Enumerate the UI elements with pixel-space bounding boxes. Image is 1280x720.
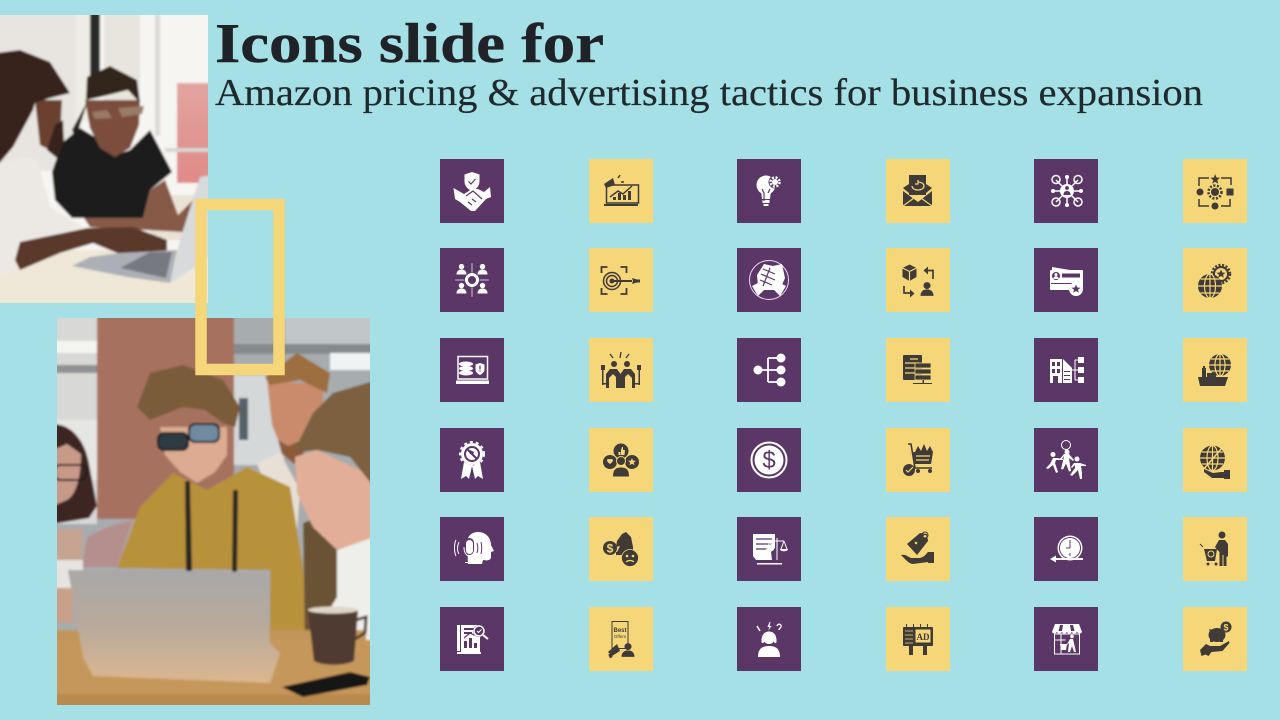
icon: storefront with shopper <box>1034 607 1098 671</box>
icon: process cycle with star <box>1183 159 1247 223</box>
icon: clasped hands in circle <box>737 248 801 312</box>
icon: credit card with star badge <box>1034 248 1098 312</box>
icon: target with dart <box>589 248 653 312</box>
icon: pricing strategy chess knight: $ <box>607 542 614 556</box>
icon: ad billboard <box>886 607 950 671</box>
icon: confused support agent <box>737 607 801 671</box>
icon: building with connected blocks <box>1034 338 1098 402</box>
icon: ad billboard: AD <box>916 632 930 642</box>
decorative yellow rectangular frame <box>201 204 279 370</box>
icon: piggy bank on hand: $ <box>1223 622 1229 632</box>
icon: branching hierarchy <box>737 338 801 402</box>
icon: head with microphone <box>440 517 504 581</box>
icon: hand with price tag <box>886 517 950 581</box>
icon: dollar coin <box>737 428 801 492</box>
icon: piggy bank on hand <box>1183 607 1247 671</box>
icon: document with server rack <box>886 338 950 402</box>
icon: legal document with scales <box>737 517 801 581</box>
icon: dollar coin: $ <box>762 447 776 474</box>
icon: best offers poster with megaphone: Best <box>613 628 627 634</box>
icon: shield handshake <box>440 159 504 223</box>
icon: person with reactions <box>589 428 653 492</box>
icon: best offers poster with megaphone: Offers <box>614 634 627 639</box>
icon: bulb with gear <box>737 159 801 223</box>
icon: best offers poster with megaphone <box>589 607 653 671</box>
icon: pricing strategy chess knight <box>589 517 653 581</box>
icon: globe on hand <box>1183 428 1247 492</box>
icon grid <box>440 159 1247 671</box>
title: Icons slide for <box>215 13 604 75</box>
icon: laptop with database and shield <box>440 338 504 402</box>
icon: people around a target <box>440 248 504 312</box>
icon: person with dollar shopping cart <box>1183 517 1247 581</box>
icon: tense meeting of people <box>589 338 653 402</box>
icon: person network <box>1034 159 1098 223</box>
icon: globe with star gear <box>1183 248 1247 312</box>
icon: award rosette <box>440 428 504 492</box>
icon: cargo ship and globe <box>1183 338 1247 402</box>
photo: two women at a laptop <box>0 11 212 307</box>
icon: envelope with refresh <box>886 159 950 223</box>
icon: shopping cart with check <box>886 428 950 492</box>
icon: chart on laptop with megaphone <box>589 159 653 223</box>
icon: package swap with person <box>886 248 950 312</box>
icon: running people with clock <box>1034 428 1098 492</box>
icon: clock with backward arrow <box>1034 517 1098 581</box>
photo: four colleagues around a laptop <box>53 314 378 709</box>
subtitle: Amazon pricing & advertising tactics for business expansion <box>215 72 1203 114</box>
icon: report with chart and magnifier <box>440 607 504 671</box>
